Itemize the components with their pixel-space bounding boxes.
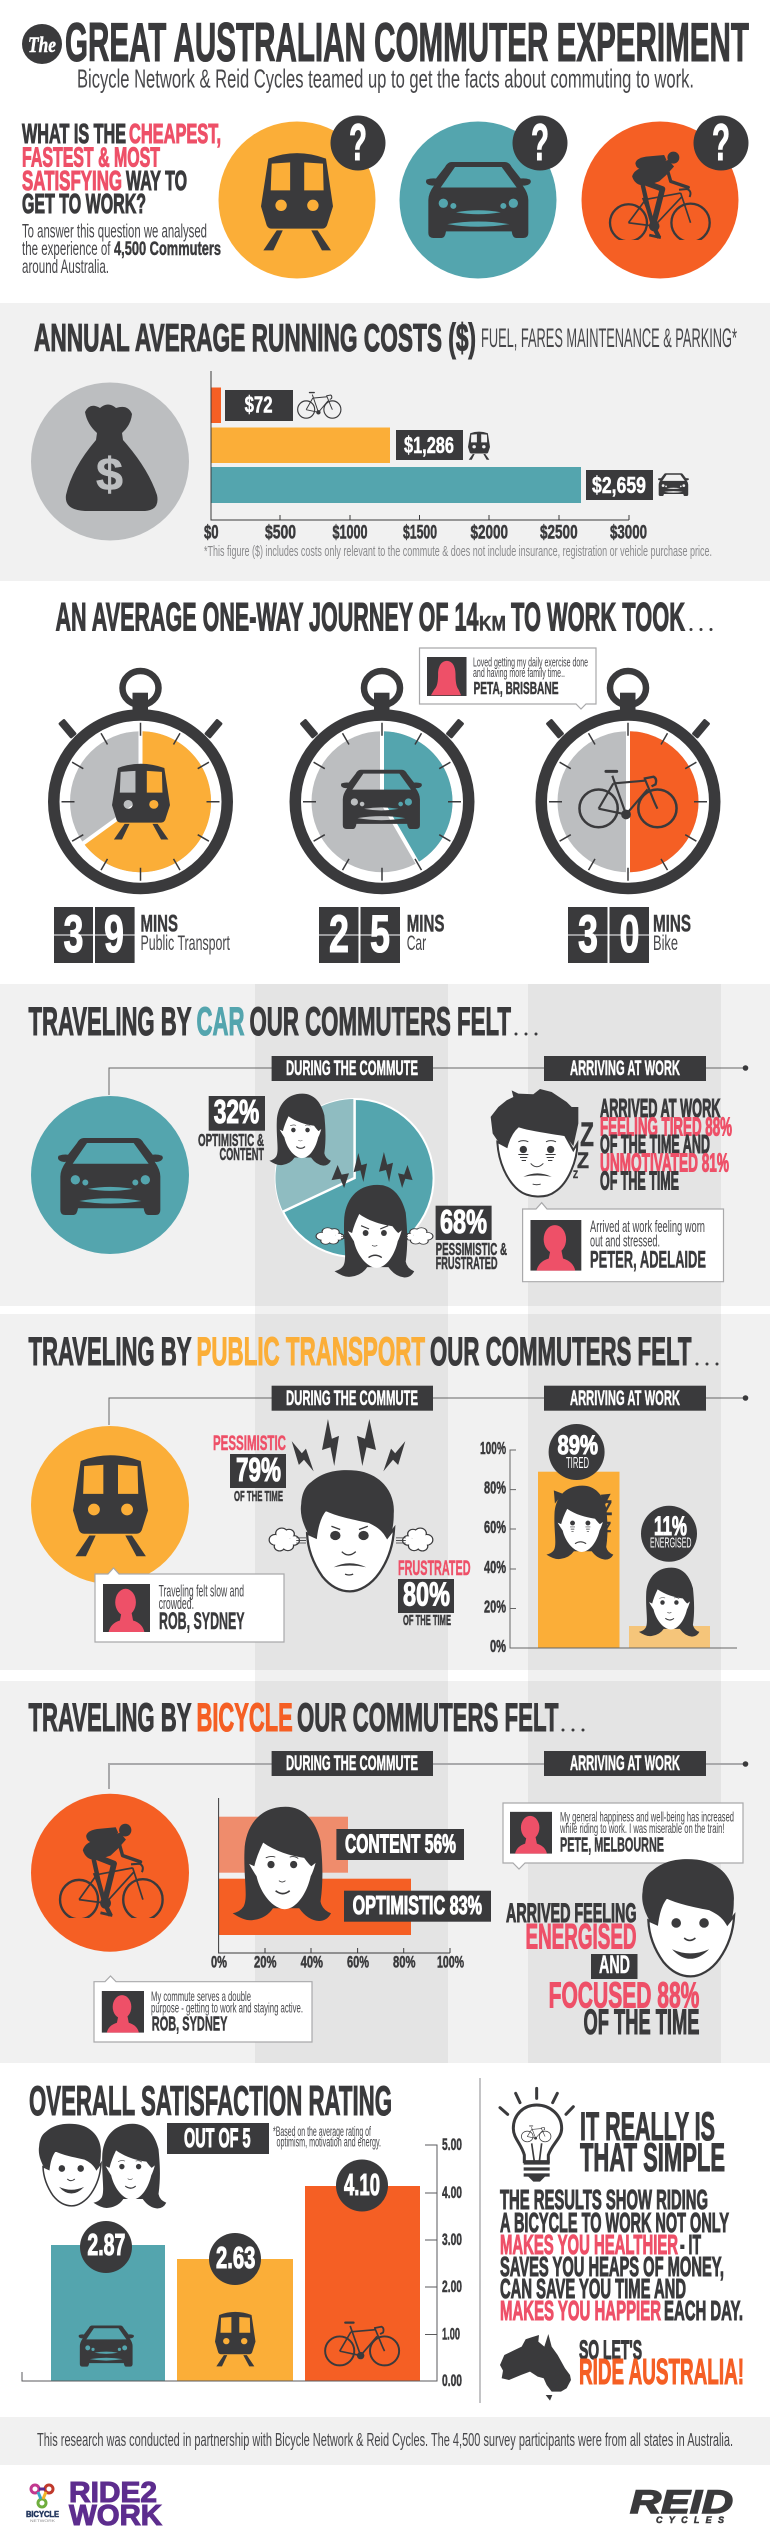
logo: Bicycle Network Ride2Work: RIDE2	[69, 2477, 157, 2509]
bar chart: ratings: 0.00	[442, 2372, 462, 2390]
footer note	[0, 2417, 770, 2465]
question text block: WAY TO	[126, 165, 187, 196]
stopwatch: car	[295, 671, 469, 888]
footnote: optimism, motivation and energy.	[276, 2135, 381, 2150]
stat: frustrated 80%: OF THE TIME	[403, 1612, 451, 1629]
callout: Peta: Loved getting my daily exercise done	[473, 656, 588, 670]
logo: Reid Cycles: CYCLES	[656, 2515, 724, 2525]
icon: smiling woman	[233, 1807, 331, 1921]
bar chart: during the commute: 100%	[437, 1954, 464, 1972]
pie chart	[275, 1099, 434, 1257]
stat: 32%: 32%	[214, 1093, 259, 1130]
icon: light bulb	[500, 2088, 573, 2182]
zzz: Z	[604, 1519, 611, 1536]
bar chart: arriving at work: 11%	[654, 1511, 687, 1541]
bar chart: arriving at work: 89%	[558, 1430, 598, 1460]
time: 39 mins: 9	[104, 905, 124, 964]
icon: tired man: Z	[573, 1169, 578, 1181]
question text block: WHAT IS THE	[22, 118, 126, 149]
stat: pessimistic 79%: PESSIMISTIC	[213, 1432, 286, 1455]
label: optimistic 83%: OPTIMISTIC 83%	[353, 1892, 482, 1920]
bar chart: during the commute	[211, 1798, 491, 1972]
question text block: To answer this question we analysed	[22, 220, 207, 242]
bar chart: costs: $1,286	[404, 432, 454, 458]
panel: traveling by public transport	[28, 1330, 748, 1656]
bar chart: arriving at work: 0%	[490, 1636, 506, 1656]
bar chart: arriving at work: ENERGISED	[650, 1535, 692, 1552]
heading: BICYCLE	[196, 1696, 293, 1740]
bar chart: arriving at work: 20%	[484, 1596, 506, 1616]
heading: KM	[479, 613, 506, 636]
stat: 68%: FRUSTRATED	[436, 1253, 498, 1273]
bar chart: costs: $3000	[610, 522, 647, 544]
bar chart: during the commute: 0%	[211, 1954, 227, 1972]
timeline header: DURING THE COMMUTE	[286, 1752, 418, 1775]
icon: frustrated woman	[317, 1152, 432, 1277]
heading: CAR	[196, 1000, 245, 1044]
bar chart: during the commute: 20%	[254, 1954, 277, 1972]
footnote	[273, 2124, 381, 2150]
question text block: SATISFYING	[22, 165, 122, 196]
logo: Bicycle Network Ride2Work: WORK	[69, 2500, 162, 2532]
callout: Pete: PETE, MELBOURNE	[560, 1835, 664, 1857]
stat: 68%: PESSIMISTIC &	[436, 1239, 507, 1259]
icon: tired man	[491, 1089, 594, 1196]
heading: TRAVELING BY	[28, 1000, 192, 1044]
timeline header	[109, 1386, 748, 1425]
divider	[479, 2078, 481, 2403]
bar chart: costs: $500	[265, 522, 296, 544]
time: 25 mins: 5	[370, 905, 390, 964]
question text block: GET TO WORK?	[22, 188, 146, 219]
bar chart: costs: $2,659	[592, 472, 646, 498]
callout: Peta: and having more family time..	[473, 666, 565, 680]
zzz	[603, 1497, 612, 1543]
panel: annual running costs	[0, 303, 770, 581]
logo: Bicycle Network Ride2Work: NETWORK	[30, 2519, 56, 2523]
panel: journey time	[54, 596, 715, 964]
heading: TRAVELING BY	[28, 1696, 192, 1740]
bar chart: arriving at work: 80%	[484, 1478, 506, 1498]
bar chart: costs: $2500	[540, 522, 578, 544]
bar chart: costs: $2000	[470, 522, 508, 544]
bar chart: ratings: 5.00	[442, 2136, 462, 2154]
bar chart: during the commute: 40%	[301, 1954, 323, 1972]
body text	[500, 2184, 743, 2326]
heading: OVERALL SATISFACTION RATING	[29, 2077, 392, 2124]
label: content 56%: CONTENT 56%	[345, 1831, 456, 1859]
icon: happy man	[642, 1859, 734, 1976]
arrived text: ENERGISED	[526, 1918, 636, 1957]
bar chart: costs: $72	[245, 392, 273, 418]
bar chart: arriving at work	[480, 1424, 737, 1656]
bar chart: during the commute: 60%	[347, 1954, 369, 1972]
timeline header: DURING THE COMMUTE	[286, 1057, 418, 1080]
bar chart: ratings: 4.00	[442, 2184, 462, 2202]
body text: - IT	[680, 2229, 701, 2260]
zzz: Z	[603, 1497, 612, 1520]
stat: 32%: CONTENT	[220, 1144, 264, 1164]
arrived text	[600, 1095, 732, 1195]
callout: Rob: purpose - getting to work and staying active.	[151, 1999, 303, 2015]
callout: Rob: ROB, SYDNEY	[152, 2014, 228, 2036]
time: 39 mins: 3	[64, 905, 84, 964]
question text block: FASTEST & MOST	[22, 142, 160, 172]
logo: Bicycle Network Ride2Work: BICYCLE	[26, 2510, 60, 2519]
callout: Pete	[503, 1803, 743, 1869]
stat: pessimistic 79%: OF THE TIME	[234, 1488, 283, 1505]
bar chart: arriving at work: 100%	[480, 1438, 506, 1458]
badge: out of 5: OUT OF 5	[184, 2123, 250, 2153]
arrived text: AND	[599, 1951, 630, 1979]
callout: Peter: out and stressed.	[590, 1233, 660, 1251]
bar chart: ratings: 2.63	[216, 2240, 255, 2275]
heading	[28, 1330, 718, 1374]
header panel	[0, 0, 770, 303]
icon: train circle: ?	[349, 114, 367, 172]
bar chart: during the commute: 80%	[393, 1954, 416, 1972]
logo: Reid Cycles	[630, 2484, 733, 2525]
time: 39 mins	[54, 905, 230, 964]
timeline header: DURING THE COMMUTE	[286, 1387, 418, 1410]
callout: Peta	[420, 648, 596, 709]
timeline header	[109, 1056, 748, 1095]
stat: 68%: 68%	[440, 1203, 487, 1240]
callout: Rob	[94, 1976, 312, 2042]
heading	[580, 2105, 725, 2180]
stat: pessimistic 79%	[213, 1432, 286, 1505]
panel: traveling by car	[28, 1000, 748, 1282]
icon: train circle	[31, 1426, 189, 1584]
heading	[28, 1000, 538, 1044]
bar chart: ratings: 1.00	[442, 2326, 460, 2344]
timeline header	[109, 1751, 748, 1789]
question text block: 4,500 Commuters	[114, 238, 221, 260]
question text block: around Australia.	[22, 256, 109, 278]
label: optimistic 83%	[344, 1891, 491, 1922]
bar chart: ratings	[22, 2136, 462, 2390]
callout: Rob: crowded.	[159, 1595, 194, 1613]
bar chart: arriving at work: 60%	[484, 1517, 506, 1537]
icon: train circle	[218, 114, 386, 278]
icon: smiling woman	[639, 1568, 699, 1637]
bar chart: costs: $0	[204, 522, 219, 544]
arrived text	[506, 1898, 700, 2042]
logo: Reid Cycles: REID	[630, 2484, 733, 2520]
icon: money bag	[31, 382, 189, 540]
logo: Bicycle Network Ride2Work	[26, 2477, 162, 2532]
callout: Rob: Traveling felt slow and	[159, 1583, 244, 1601]
panel: it really is that simple	[500, 2088, 744, 2401]
callout: Rob: My commute serves a double	[151, 1988, 251, 2004]
icon: map of Australia	[500, 2334, 571, 2401]
bar chart: costs	[204, 371, 689, 544]
time: 30 mins	[568, 905, 691, 964]
icon: money bag: $	[96, 448, 123, 500]
panel backgrounds: commute sections	[0, 984, 770, 2063]
bar chart: ratings: 2.00	[442, 2278, 462, 2296]
icon: smiling woman	[269, 1094, 331, 1166]
footnote: *Based on the average rating of	[273, 2124, 371, 2139]
time: 30 mins: MINS	[653, 911, 691, 938]
callout: Peter	[523, 1203, 724, 1282]
icon: tired man: Z	[580, 1116, 594, 1154]
icon: cyclist circle: ?	[712, 114, 730, 172]
time: 25 mins: Car	[407, 932, 426, 955]
time: 39 mins: Public Transport	[140, 932, 230, 955]
callout: Rob	[95, 1568, 284, 1642]
question text block: the experience of	[22, 238, 111, 260]
stopwatch: bike	[541, 671, 715, 888]
stat: 32%	[198, 1093, 265, 1164]
stat: 68%	[436, 1203, 507, 1273]
question text block	[22, 118, 221, 278]
icon: cyclist circle	[31, 1794, 189, 1952]
bar chart: ratings: 3.00	[442, 2231, 462, 2249]
arrived text: OF THE TIME	[600, 1167, 679, 1195]
stat: frustrated 80%: 80%	[403, 1576, 450, 1613]
icon: car circle	[31, 1096, 189, 1254]
icon: frustrated man	[270, 1419, 432, 1591]
icon: tired woman	[546, 1486, 613, 1560]
heading: PUBLIC TRANSPORT	[196, 1330, 425, 1374]
stat: frustrated 80%: FRUSTRATED	[398, 1557, 470, 1580]
icon: man and woman	[39, 2124, 166, 2209]
label: content 56%	[336, 1829, 464, 1860]
time: 39 mins: MINS	[140, 911, 178, 938]
heading	[28, 1696, 584, 1740]
call to action	[579, 2335, 744, 2392]
time: 30 mins: 0	[620, 905, 640, 964]
bar chart: costs: $1000	[332, 522, 368, 544]
stat: pessimistic 79%: 79%	[236, 1451, 281, 1488]
heading: OUR COMMUTERS FELT	[250, 1000, 511, 1044]
call to action: SO LET'S	[579, 2335, 642, 2365]
icon: cyclist circle	[582, 114, 748, 278]
badge: out of 5	[167, 2123, 269, 2154]
time: 25 mins	[319, 905, 444, 964]
icon: car circle	[400, 114, 568, 278]
bar chart: ratings: 4.10	[344, 2167, 380, 2202]
question text block: CHEAPEST,	[129, 118, 221, 149]
callout: Rob: ROB, SYDNEY	[159, 1608, 245, 1635]
title badge: The: The	[28, 32, 56, 57]
bar chart: arriving at work: TIRED	[566, 1455, 589, 1472]
heading: TRAVELING BY	[28, 1330, 192, 1374]
zzz: Z	[603, 1534, 607, 1543]
bar chart: costs: $1500	[403, 522, 437, 544]
stopwatch: public transport	[54, 671, 227, 888]
icon: car circle: ?	[531, 114, 549, 172]
time: 25 mins: MINS	[407, 911, 444, 938]
time: 30 mins: Bike	[653, 932, 678, 955]
title badge: The	[22, 24, 62, 64]
heading: OUR COMMUTERS FELT	[297, 1696, 558, 1740]
time: 30 mins: 3	[578, 905, 598, 964]
time: 25 mins: 2	[329, 905, 349, 964]
icon: tired man: Z	[577, 1148, 589, 1173]
stat: frustrated 80%	[398, 1557, 470, 1629]
bar chart: ratings: 2.87	[87, 2227, 125, 2262]
callout: Peta: PETA, BRISBANE	[474, 678, 558, 698]
arrived text: ARRIVED FEELING	[506, 1898, 636, 1928]
panel: overall satisfaction	[22, 2077, 462, 2390]
stat: 32%: OPTIMISTIC &	[198, 1130, 264, 1150]
panel: traveling by bicycle	[28, 1696, 748, 2042]
bar chart: arriving at work: 40%	[484, 1557, 506, 1577]
